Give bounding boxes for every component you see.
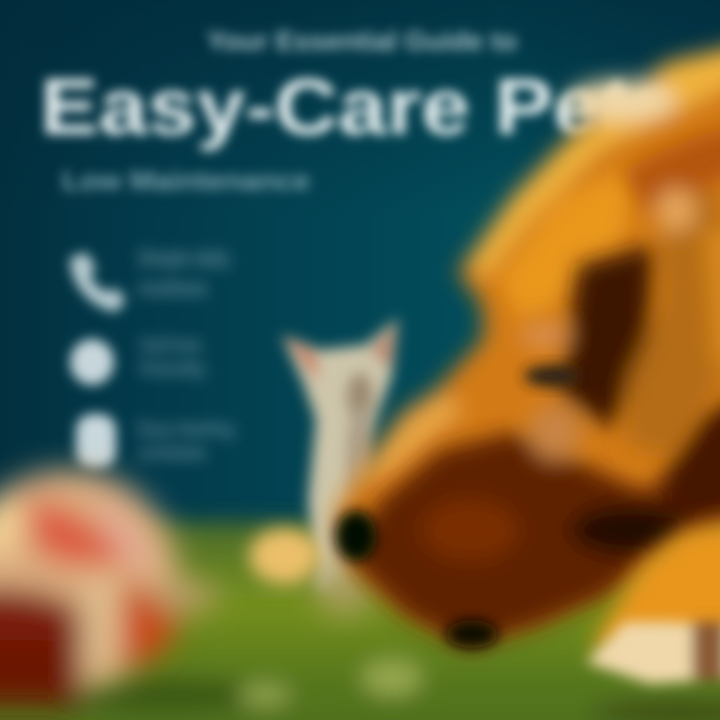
text: item three: Easy feeding: [138, 416, 234, 441]
eye patch dark: [560, 245, 654, 430]
muzzle dark: [355, 432, 720, 648]
item text: routines: [138, 275, 208, 302]
illustration: cat: [249, 318, 398, 616]
dog head base: [335, 40, 720, 642]
muzzle edge highlight: [350, 392, 462, 490]
icon: home: [70, 339, 114, 385]
ear top shadow: [620, 120, 720, 215]
grass ground: [0, 522, 720, 720]
item text: friendly: [140, 356, 207, 381]
cat paw: [249, 528, 321, 584]
ear: [628, 190, 720, 455]
bright mane edge: [470, 42, 720, 280]
dog leg: [590, 515, 720, 650]
list of care items: [70, 245, 234, 468]
cream highlight by title: [568, 80, 676, 120]
brow and cheek: [519, 321, 571, 349]
dark behind ear: [660, 385, 720, 520]
dog eye: [524, 365, 580, 387]
text: item one: Simple daily: [138, 245, 230, 272]
icon: bottle: [76, 414, 116, 468]
subtitle lower: Low Maintenance: [62, 165, 310, 196]
text: item two: Small home: [140, 332, 202, 357]
illustration: dog: [335, 40, 720, 684]
item text: schedule: [138, 440, 206, 465]
illustration: ball: [0, 470, 218, 705]
mid orange band: [500, 160, 640, 320]
icon: phone: [70, 252, 126, 312]
title: Easy-Care Pets: [40, 62, 680, 151]
dog chin shadow: [446, 620, 498, 648]
subtitle top: Your Essential Guide to: [207, 26, 517, 56]
item text: [138, 245, 234, 465]
dog paw: [586, 622, 720, 684]
dog nose: [335, 510, 377, 562]
heading block: [40, 26, 680, 196]
